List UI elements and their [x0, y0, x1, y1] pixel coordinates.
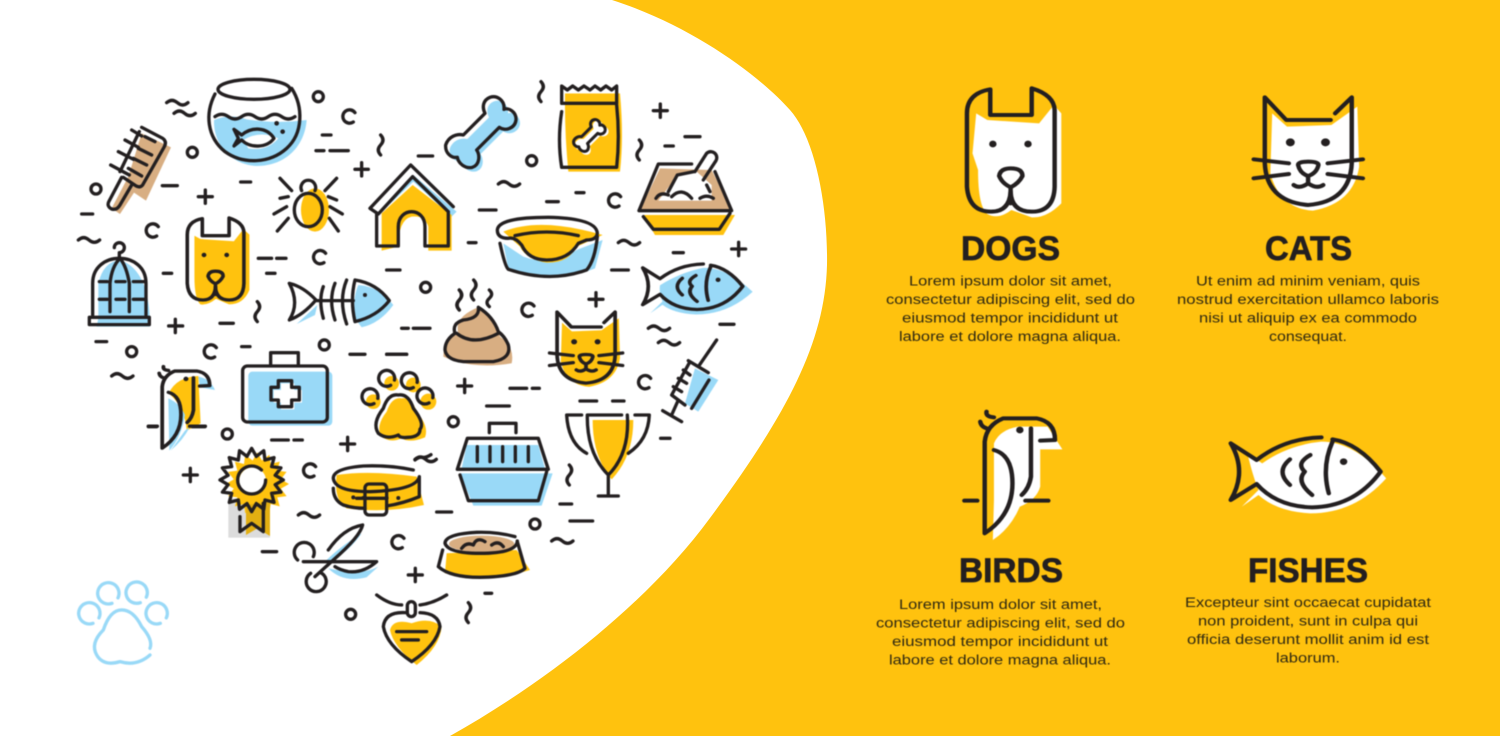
- icon: fish: [643, 264, 753, 314]
- artwork layer: [76, 79, 1439, 668]
- icon: trophy: [567, 415, 649, 496]
- panel: dogs: [886, 88, 1135, 344]
- text block: dogs: [886, 274, 1135, 344]
- icon: dog poop: [443, 280, 512, 366]
- heading: fishes: FISHES: [1248, 552, 1368, 590]
- text block: fishes: laborum.: [1276, 650, 1340, 666]
- icon: large parrot: [964, 412, 1062, 540]
- icon: pet bed: [497, 217, 603, 278]
- icon: large cat: [1254, 97, 1363, 211]
- text block: dogs: Lorem ipsum dolor sit amet,: [909, 274, 1112, 288]
- icon: tick: [274, 178, 342, 232]
- text block: birds: consectetur adipiscing elit, sed do: [876, 616, 1125, 630]
- icon: syringe: [663, 340, 718, 422]
- heading: dogs: DOGS: [961, 230, 1060, 268]
- text block: cats: nostrud exercitation ullamco laboris: [1177, 292, 1439, 307]
- icon: fish skeleton: [289, 280, 393, 327]
- icon: blue paw logo: [76, 579, 170, 663]
- white curved panel: [0, 0, 827, 736]
- text block: birds: labore et dolore magna aliqua.: [889, 652, 1111, 668]
- text block: birds: eiusmod tempor incididunt ut: [892, 634, 1108, 649]
- icon: litter box: [639, 152, 735, 235]
- text block: birds: [876, 597, 1125, 668]
- panel: cats: [1177, 97, 1439, 344]
- text block: fishes: officia deserunt mollit anim id est: [1187, 632, 1429, 647]
- icon: collar: [333, 466, 424, 515]
- text block: cats: Ut enim ad minim veniam, quis: [1196, 274, 1420, 288]
- icon: paw print: [359, 367, 436, 441]
- panel: birds: [876, 412, 1125, 668]
- text block: dogs: consectetur adipiscing elit, sed do: [886, 292, 1135, 307]
- icon: dog face: [187, 218, 249, 305]
- icon: first aid kit: [243, 353, 332, 426]
- heading: cats: CATS: [1265, 230, 1352, 268]
- text block: fishes: Excepteur sint occaecat cupidatat: [1185, 595, 1431, 610]
- decorative symbols upper left: [78, 92, 462, 358]
- icon: bird cage: [89, 243, 150, 327]
- icon: cat face: [550, 312, 623, 387]
- text block: cats: nisi ut aliquip ex ea commodo: [1199, 310, 1417, 326]
- heading: birds: BIRDS: [959, 552, 1063, 590]
- text block: birds: Lorem ipsum dolor sit amet,: [899, 597, 1102, 612]
- text block: dogs: eiusmod tempor incididunt ut: [902, 310, 1118, 326]
- icon: pet carrier: [457, 423, 553, 506]
- icon: food bowl: [438, 532, 530, 578]
- icon: fish bowl: [209, 79, 307, 166]
- icon: heart pet tag: [377, 595, 447, 665]
- panel: heart of pet icons: [76, 79, 753, 665]
- icon: grooming brush: [108, 127, 171, 214]
- text block: cats: consequat.: [1269, 329, 1347, 344]
- icon: bone: [446, 97, 520, 172]
- decorative symbols upper right: [468, 82, 746, 345]
- text block: fishes: [1185, 595, 1431, 666]
- icon: large dog: [967, 88, 1061, 217]
- icon: scissors: [294, 525, 378, 592]
- panel: fishes: [1185, 437, 1431, 666]
- icon: award ribbon: [220, 448, 289, 538]
- icon: pet food bag: [559, 86, 622, 172]
- decorative symbols lower left: [112, 374, 431, 619]
- icon: dog house: [370, 165, 457, 251]
- icon: parrot: [148, 367, 215, 451]
- decorative symbols lower right: [387, 354, 670, 623]
- text block: cats: [1177, 274, 1439, 344]
- text block: dogs: labore et dolore magna aliqua.: [899, 329, 1121, 344]
- text block: fishes: non proident, sunt in culpa qui: [1198, 614, 1418, 628]
- icon: large fish: [1231, 437, 1386, 513]
